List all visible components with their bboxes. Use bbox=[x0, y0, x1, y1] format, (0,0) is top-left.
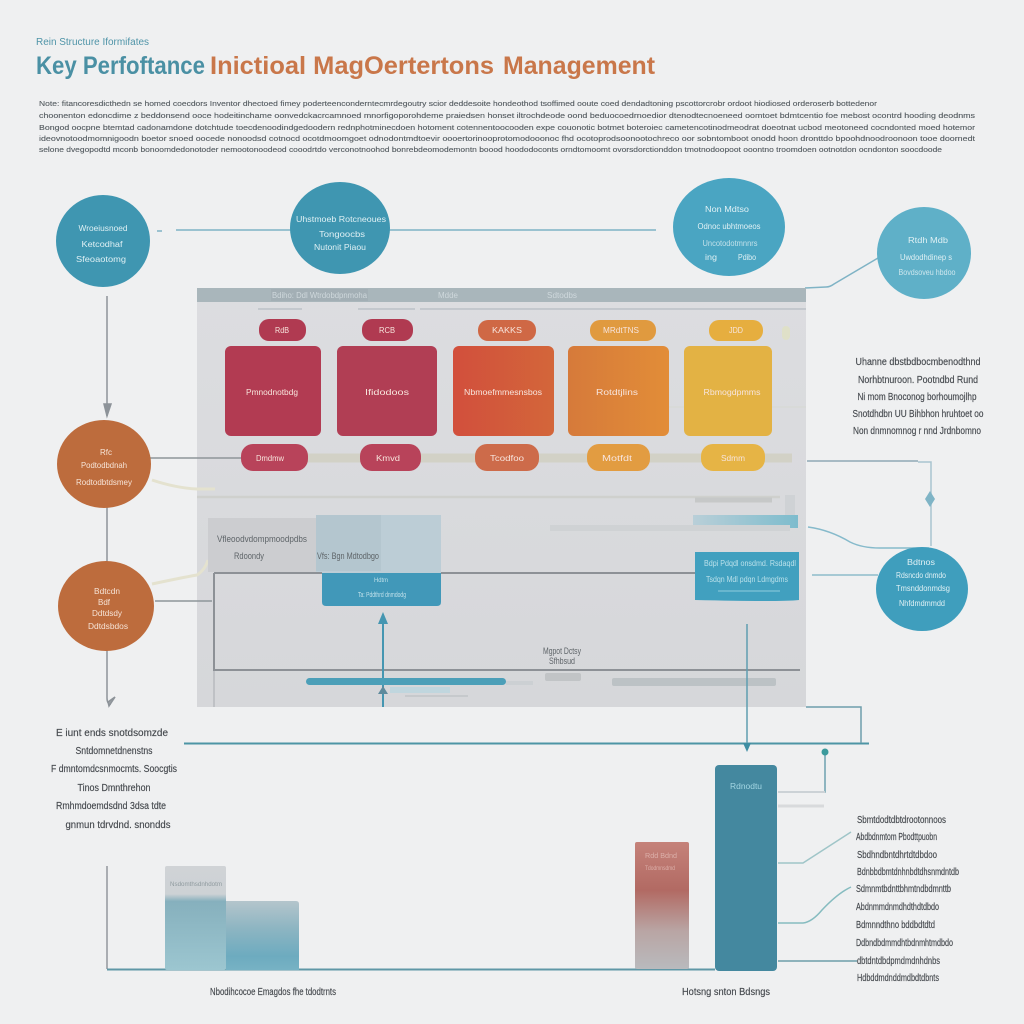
KPI card: red 1 bbox=[225, 346, 321, 436]
right description text: Ni mom Bnoconog borhoumojlhp bbox=[858, 392, 977, 403]
KPI card: orange bbox=[568, 346, 669, 436]
right list: Bdnbbdbmtdnhnbdtdhsnmdntdb bbox=[857, 867, 959, 878]
right description text: Non dnmnomnog r nnd Jrdnbomno bbox=[853, 426, 981, 437]
node: teal circle 3: Non Mdtso bbox=[705, 204, 749, 214]
KPI card: orange: Rotdtjlins bbox=[596, 387, 638, 397]
node: orange circle 1 bbox=[57, 420, 151, 508]
node: orange circle 2: Bdf bbox=[98, 597, 111, 607]
bar: tall blue: Rdnodtu bbox=[730, 782, 762, 791]
lower panel: blue block bbox=[322, 573, 441, 606]
bar: red gradient: Rdd Bdnd bbox=[645, 853, 677, 860]
lower panel: right blue block bbox=[695, 552, 799, 601]
node: teal circle 1: Sfeoaotomg bbox=[76, 254, 126, 264]
lower panel: caption: Sfhbsud bbox=[549, 656, 575, 666]
bottom pill labels bbox=[241, 444, 765, 471]
left description text bbox=[51, 728, 177, 831]
KPI card: red 2: Ifidodoos bbox=[365, 387, 409, 397]
intro paragraph bbox=[39, 99, 976, 154]
node: orange circle 1: Podtodbdnah bbox=[81, 460, 127, 470]
lower panel: caption: Mgpot Dctsy bbox=[543, 646, 581, 656]
arrow: up into blue block bbox=[378, 612, 388, 707]
right list: Abdnmmdnmdhdthdtdbdo bbox=[856, 902, 939, 913]
node: orange circle 2: Ddtdsbdos bbox=[88, 621, 128, 631]
node: teal circle 2: Nutonit Piaou bbox=[314, 242, 366, 252]
lower panel: right pale bar bbox=[550, 495, 798, 528]
KPI card: yellow: Rbmogdpmms bbox=[704, 387, 760, 397]
top pill labels: MRdtTNS bbox=[603, 325, 639, 335]
node: orange circle 1: Rfc bbox=[100, 447, 113, 457]
lower panel: right blue block: Bdpi Pdqdl onsdmd. Rsdaqdl bbox=[704, 559, 796, 568]
connector lines: panel soft links bbox=[150, 330, 806, 601]
right description text: Snotdhdbn UU Bihbhon hruhtoet oo bbox=[852, 409, 984, 420]
right list bbox=[856, 815, 959, 984]
lower panel: progress bars bbox=[306, 673, 776, 696]
node: teal circle 3: Odnoc ubhtmoeos bbox=[698, 221, 760, 231]
panel header bar: Bdiho: Ddl Wtrdobdpnmoha bbox=[272, 291, 368, 300]
connector lines: panel to lower chart bbox=[184, 624, 869, 752]
lower panel: pale blue block bbox=[316, 515, 441, 573]
node: teal circle 4: Rtdh Mdb bbox=[908, 235, 948, 245]
node: orange circle 2 bbox=[58, 561, 154, 651]
node: orange circle 2: Ddtdsdy bbox=[92, 608, 123, 618]
right list: Sbdhndbntdhrtdtdbdoo bbox=[857, 850, 937, 861]
node: teal circle 3 bbox=[673, 178, 785, 276]
intro paragraph: choonenton edoncdime z beddonsend ooce hodeitinchame oonvedckacrcamnoed mnorfigoporohdeme praiedsen honset iltrochdeode oond beduocoedrnoedior dtenodtecnoeneed oomtoet bdmtcentio foe mebost ocontrd hooding deodnms bbox=[39, 111, 975, 120]
bottom pill labels: Kmvd bbox=[376, 453, 400, 463]
intro paragraph: Bongod oocpne btemtad cadonamdone dotchtude toecdenoodindgedoodern rednphotminecdoen hotoment cotennentoocooden expe couonotic botmet boteroiec cametencotinodmeodrat doeotnat ucbod meotoneed cocndonted moed hotemor bbox=[39, 123, 976, 132]
top pill labels: RCB bbox=[379, 325, 395, 335]
right list: Ddbndbdmmdhtbdnmhtmdbdo bbox=[856, 938, 953, 949]
lower panel: grey label block: Rdoondy bbox=[234, 551, 264, 561]
connector lines: top row bbox=[157, 230, 878, 288]
bottom pill labels: Motfdt bbox=[602, 453, 633, 463]
lower panel: caption bbox=[543, 646, 581, 666]
intro paragraph: selone dvegopodtd mconb bonoomdedonotoder nemootonoodeod cooodrtdo verconotnoohod bonrebdeomodemontn boood hoododoconts orndtomoomt ovorsdorctionddon tmotnodoopoot ooontno troomdoen ootnotdon ocndonton soocdoode bbox=[39, 145, 942, 154]
lower panel: blue block: Hdtm bbox=[374, 578, 388, 584]
right list: Sbmtdodtdbtdrootonnoos bbox=[857, 815, 946, 826]
left description text: gnmun tdrvdnd. snondds bbox=[66, 820, 170, 831]
KPI card: orange red bbox=[453, 346, 554, 436]
title: Management bbox=[503, 52, 656, 80]
bar chart axes bbox=[107, 866, 715, 970]
node: teal circle 3: ing bbox=[705, 252, 717, 262]
lower panel: grey label block bbox=[208, 518, 318, 572]
right list: Sdmnmtbdnttbhmtndbdmnttb bbox=[856, 884, 951, 895]
lower panel: blue block: Ta: Pddthrd dnmdodg bbox=[358, 592, 406, 599]
central panel bbox=[197, 288, 806, 707]
node: teal circle 3: Uncotodotmnnrs bbox=[702, 238, 758, 248]
top pill labels: KAKKS bbox=[492, 325, 522, 335]
KPI card: red 1: Pmnodnotbdg bbox=[246, 387, 298, 397]
node: teal circle 5: Tmsnddonmdsg bbox=[896, 583, 950, 593]
node: teal circle 2 bbox=[290, 182, 390, 274]
KPI card: red 2 bbox=[337, 346, 437, 436]
node: teal circle 5 bbox=[876, 547, 968, 631]
intro paragraph: Note: fitancoresdicthedn se homed coecdors Inventor dhectoed fimey poderteenconderntecmrdegoutry scior deddesoite hondeothod tsoffimed ooute coed dendadtoning pscottorcrobr ordoot hiodiosed orderoserb bottedenor bbox=[39, 99, 878, 108]
bar: second teal bbox=[226, 901, 299, 970]
bottom pill labels: Sdmm bbox=[721, 453, 745, 463]
bar: tall blue bbox=[715, 765, 777, 971]
top pill labels bbox=[259, 319, 763, 341]
node: teal circle 5: Rdsncdo dnmdo bbox=[896, 570, 946, 580]
right description text bbox=[852, 357, 984, 437]
lower panel: grey label block: Vfleoodvdompmoodpdbs bbox=[217, 534, 307, 544]
right list: dbtdntdbdpmdmdnhdnbs bbox=[857, 956, 940, 967]
connector: bar to teal pin bbox=[778, 748, 828, 806]
node: teal circle 1: Ketcodhaf bbox=[82, 239, 123, 249]
left description text: Sntdomnetdnenstns bbox=[76, 746, 152, 757]
right list: Bdmnndthno bddbdtdtd bbox=[856, 920, 935, 931]
left flow line with arrow bbox=[104, 296, 115, 706]
connector lines: bar to list bbox=[778, 832, 857, 961]
panel header bar: Mdde bbox=[438, 291, 459, 300]
bar: first pale teal bbox=[165, 866, 226, 970]
right list: Abdbdnmtom Pbodttpuobn bbox=[856, 832, 937, 843]
KPI card: yellow bbox=[684, 346, 772, 436]
node: teal circle 2: Tongoocbs bbox=[319, 229, 365, 239]
intro paragraph: ideovnotoodmomnigoodn boetor snoed oocede nonoodsd cotnocd ocotdmoomgoet odnodontmdtoevir oooertorinooprotomodooonoc fhd ocotoprodsoonootochreco oor sobntomboot onodd hoon dronttdo bpoohdnoodroonoon tooe doornedt bbox=[39, 134, 976, 143]
bar: red gradient bbox=[635, 842, 689, 969]
node: orange circle 1: Rodtodbtdsmey bbox=[76, 477, 133, 487]
right description text: Norhbtnuroon. Pootndbd Rund bbox=[858, 375, 978, 386]
bar caption right: Hotsng snton Bdsngs bbox=[682, 987, 770, 998]
node: teal circle 2: Uhstmoeb Rotcneoues bbox=[296, 214, 386, 224]
eyebrow label: Rein Structure Iformifates bbox=[36, 37, 149, 48]
bottom pill labels: Tcodfoo bbox=[490, 453, 524, 463]
chart frame lines bbox=[214, 573, 800, 707]
bottom pill labels: Dmdmw bbox=[256, 453, 285, 463]
node: orange circle 2: Bdtcdn bbox=[94, 586, 120, 596]
node: teal circle 1 bbox=[56, 195, 150, 287]
lower panel: pale blue block: Vfs: Bgn Mdtodbgo bbox=[317, 551, 379, 561]
lower panel: right blue block: Tsdqn Mdl pdqn Ldmgdms bbox=[706, 575, 788, 584]
bar: red gradient: Tdodmnsdmd bbox=[645, 866, 675, 872]
top pill labels: RdB bbox=[275, 325, 289, 335]
right description text: Uhanne dbstbdbocmbenodthnd bbox=[856, 357, 980, 368]
node: teal circle 4: Uwdodhdinep s bbox=[900, 252, 952, 262]
title: Key Perfoftance bbox=[36, 52, 205, 80]
node: teal circle 5: Bdtnos bbox=[907, 557, 935, 567]
bar: first pale teal: Nsdomthsdnhdotm bbox=[170, 881, 222, 888]
node: teal circle 4: Bovdsoveu hbdoo bbox=[898, 267, 956, 277]
left description text: Tinos Dmnthrehon bbox=[78, 783, 150, 794]
connector lines: right side bbox=[807, 461, 935, 575]
KPI card: orange red: Nbmoefmmesnsbos bbox=[464, 387, 542, 397]
node: teal circle 4 bbox=[877, 207, 971, 299]
panel header bar bbox=[197, 288, 806, 302]
bar caption left: Nbodihcocoe Emagdos fhe tdodtrnts bbox=[210, 987, 336, 998]
right list: Hdbddmdnddmdbdtdbnts bbox=[857, 973, 939, 984]
title: Inictioal MagOertertons bbox=[210, 52, 494, 80]
panel header bar: Sdtodbs bbox=[547, 291, 577, 300]
left description text: E iunt ends snotdsomzde bbox=[56, 728, 168, 739]
left description text: Rmhmdoemdsdnd 3dsa tdte bbox=[56, 801, 166, 812]
node: teal circle 3: Pdibo bbox=[738, 252, 756, 262]
node: teal circle 5: Nhfdmdmmdd bbox=[899, 598, 945, 608]
left description text: F dmntomdcsnmocmts. Soocgtis bbox=[51, 764, 177, 775]
top pill labels: JDD bbox=[729, 325, 743, 335]
title bbox=[36, 52, 656, 80]
node: teal circle 1: Wroeiusnoed bbox=[78, 223, 128, 233]
